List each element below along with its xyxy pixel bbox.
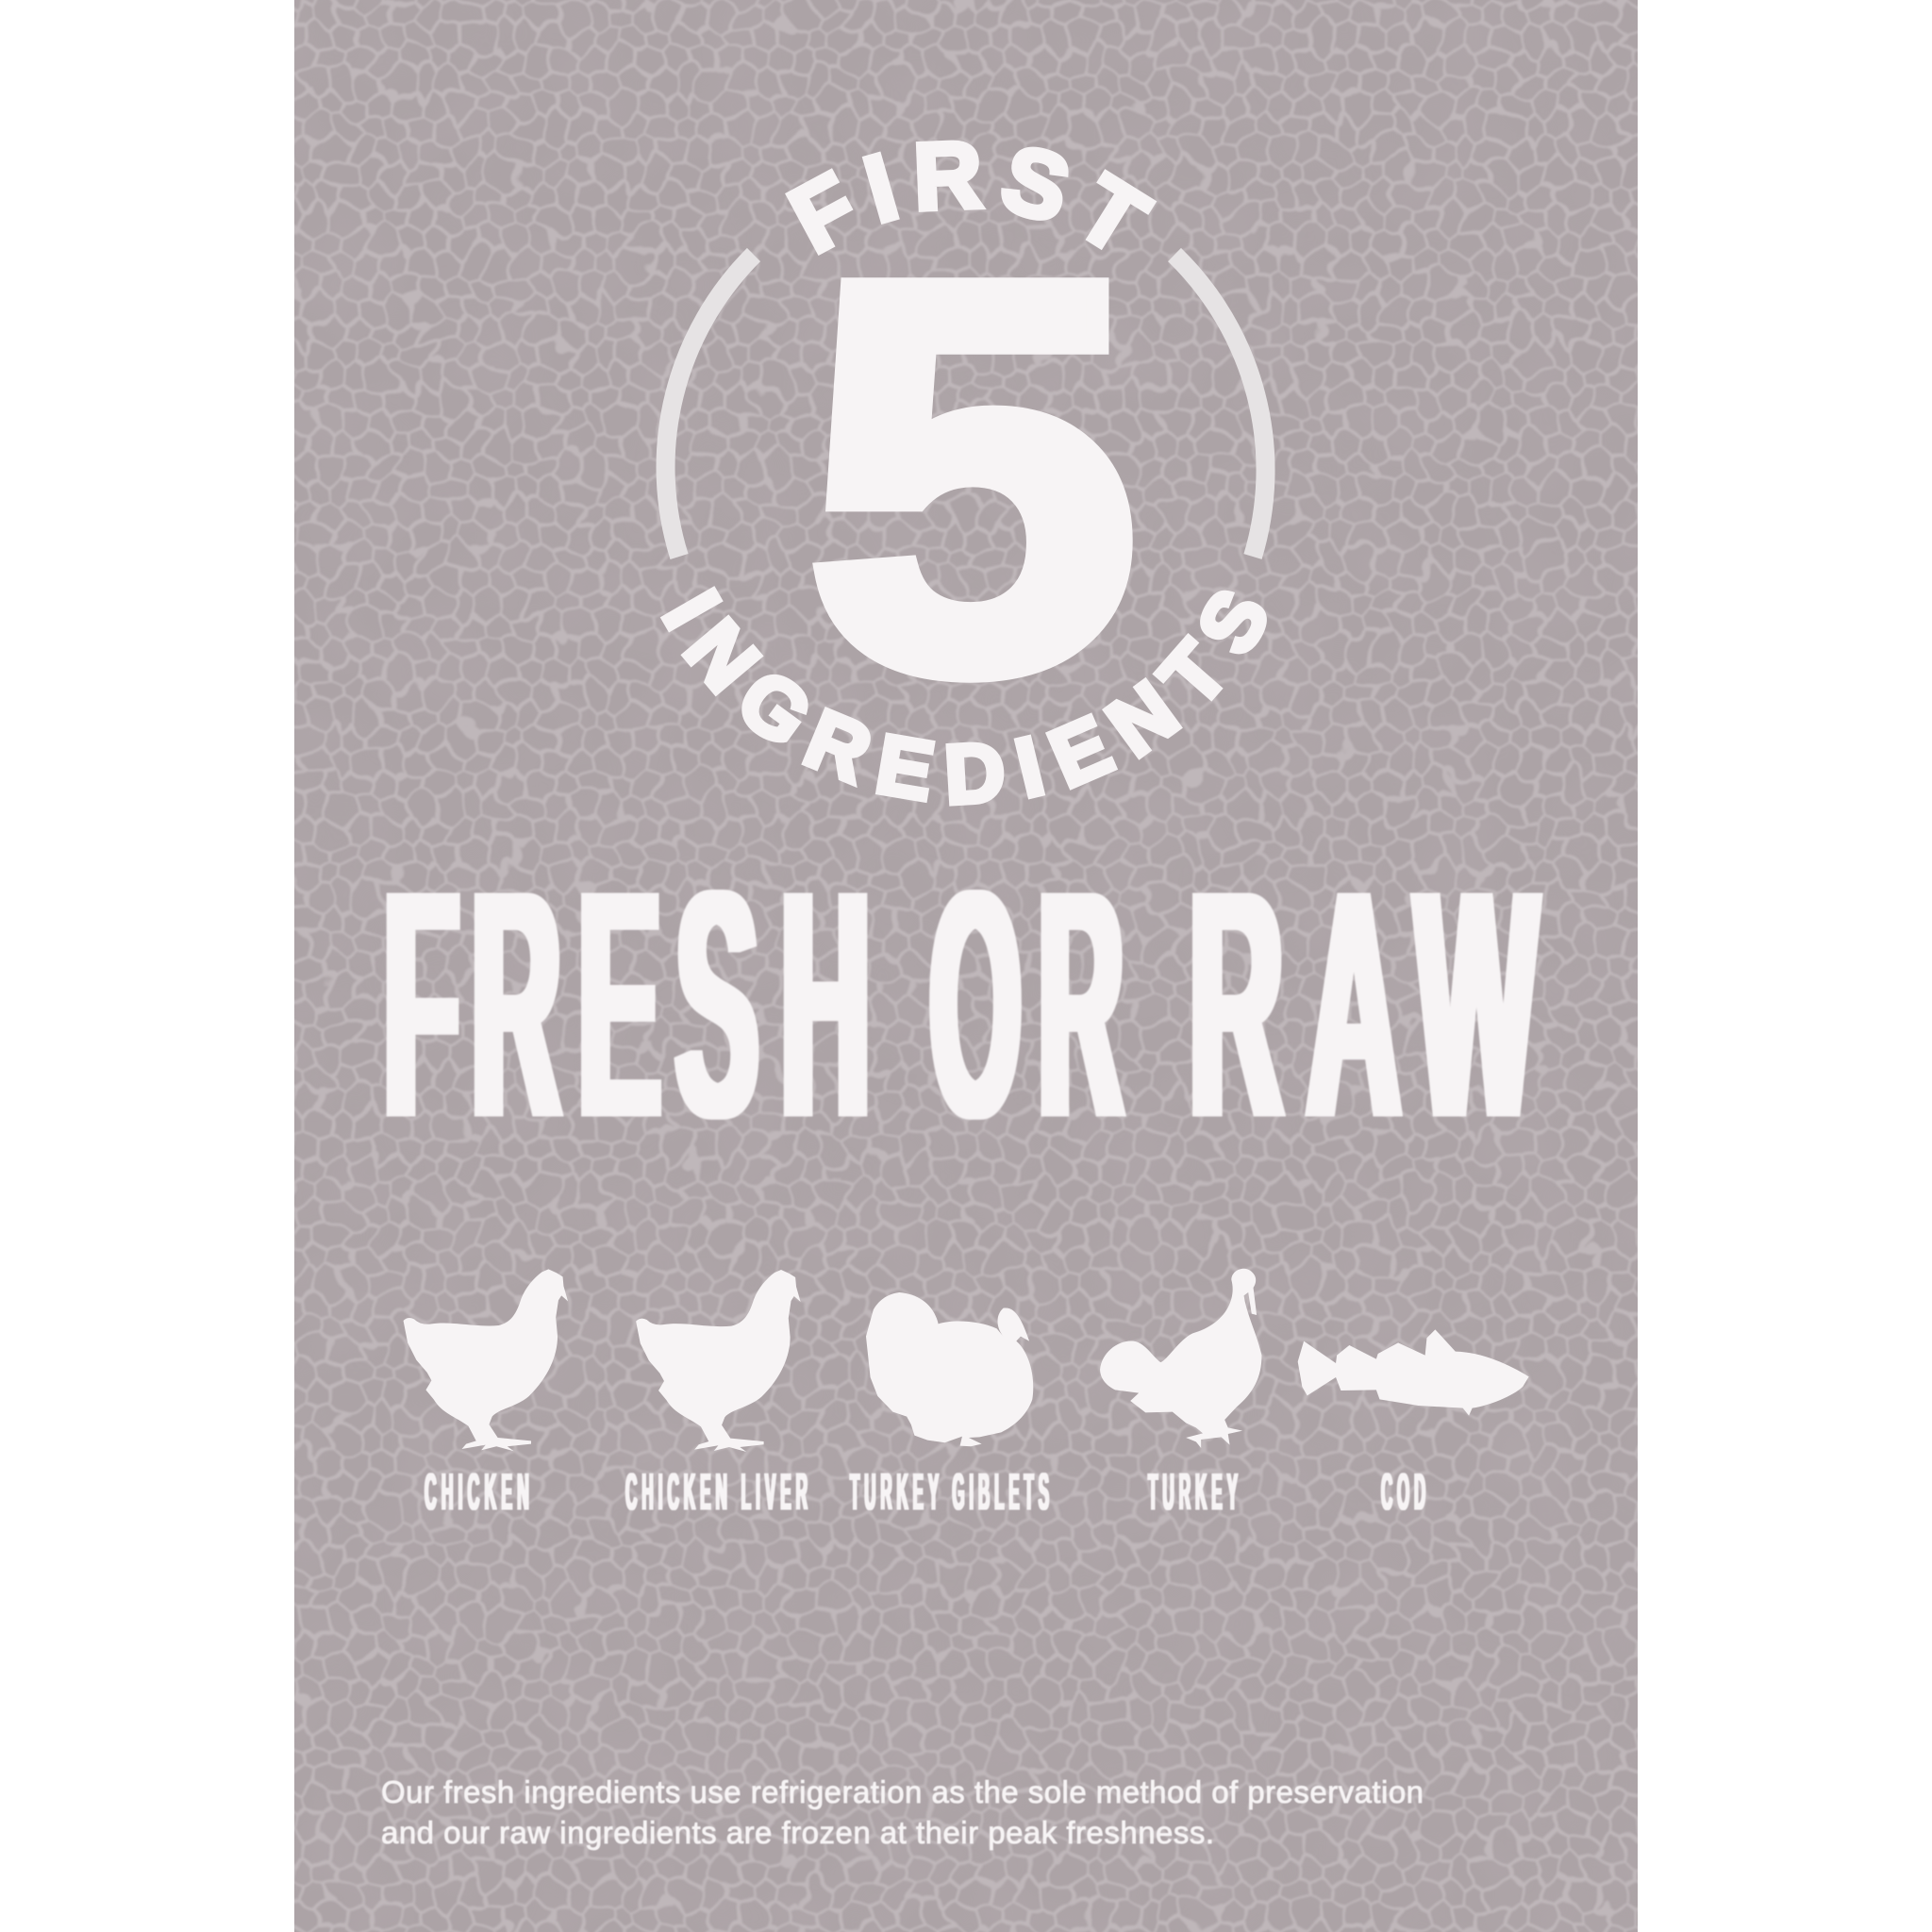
icon: cod fish [1298,1329,1529,1416]
footnote text: Our fresh ingredients use refrigeration as the sole method of preservation [381,1774,1424,1809]
footnote text [381,1774,1424,1850]
icon: chicken [404,1269,568,1451]
heading: fresh or raw: RAW [1190,824,1539,1186]
heading: fresh or raw [384,823,1539,1186]
ingredient: chicken liver [625,1270,812,1521]
ingredient: cod: COD [1381,1462,1430,1521]
icons and labels row: TURKEY [1148,1462,1242,1521]
curved word: ingredients: INGREDIENTS [660,586,1267,807]
panel: leather background [247,0,1685,1932]
icon: turkey fanned [866,1292,1033,1446]
ingredient: turkey [1100,1269,1261,1521]
icons and labels row: TURKEY GIBLETS [850,1462,1054,1521]
ingredient: turkey giblets [850,1292,1054,1521]
icon: chicken liver [636,1270,801,1452]
ingredient: cod [1298,1329,1529,1521]
heading: fresh or raw: FRESH [384,823,870,1185]
footnote text: and our raw ingredients are frozen at their peak freshness. [381,1815,1214,1850]
icon: turkey side [1100,1269,1261,1448]
icons and labels row: CHICKEN LIVER [625,1462,812,1521]
badge: first 5 ingredients [657,140,1275,807]
ingredient: chicken [404,1269,568,1521]
curved word: first: FIRST [785,140,1157,256]
ring arcs [666,255,1266,557]
number 5: 5 [808,169,1138,784]
icons and labels row [404,1269,1529,1521]
icons and labels row: CHICKEN [425,1462,534,1521]
heading: fresh or raw: OR [930,824,1123,1185]
